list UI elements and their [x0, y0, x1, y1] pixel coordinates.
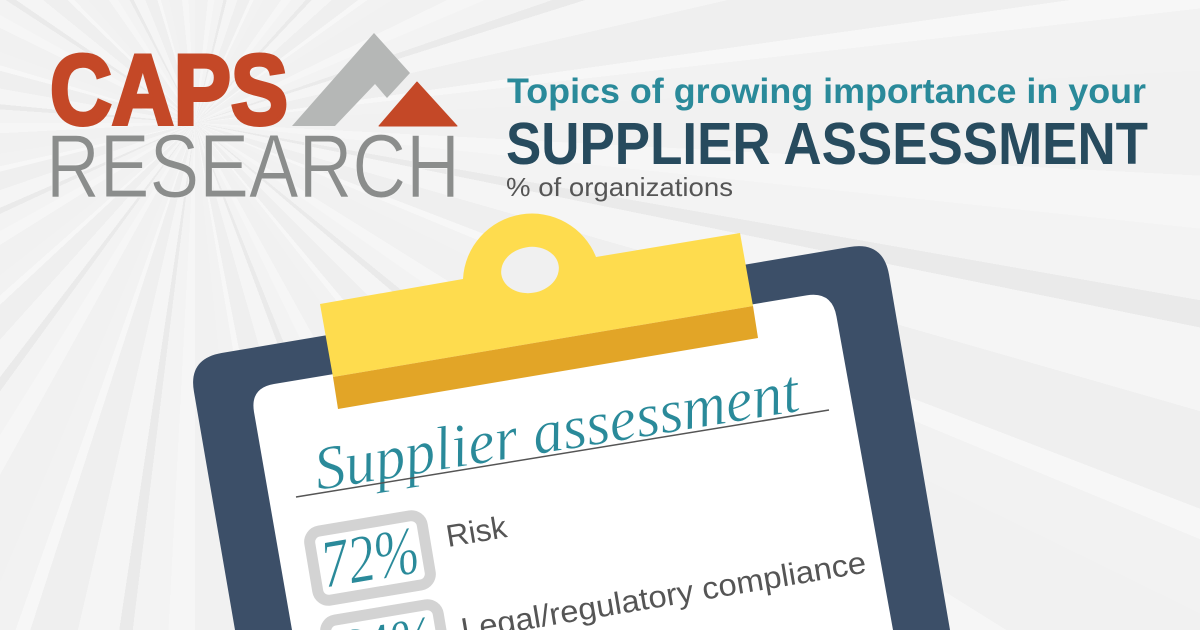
heading block [506, 72, 1148, 202]
checklist row: 64% Legal/regulatory compliance [323, 545, 869, 630]
clip: hole [498, 243, 562, 297]
logo mountain: red peak [379, 82, 457, 126]
clipboard paper [253, 295, 893, 630]
logo: CAPS Research [46, 33, 460, 217]
value box: 72%: 72% [315, 511, 424, 603]
logo word: RESEARCH: RESEARCH [46, 117, 460, 217]
logo mountain: grey peak [292, 33, 410, 126]
clipboard clip [320, 214, 758, 409]
clip: yellow body [320, 214, 753, 377]
checklist row: 72% Risk [307, 509, 510, 604]
clipboard board [193, 246, 950, 630]
clip: shaded lower band [333, 306, 758, 409]
title underline [296, 410, 829, 497]
heading line: topics of growing importance: Topics of growing importance in your [507, 72, 1146, 111]
subheading: % of organizations: % of organizations [506, 172, 733, 202]
logo word: CAPS: CAPS [50, 34, 288, 145]
checklist title: handwritten Supplier assessment: Supplier assessment [309, 357, 806, 504]
label: Risk: Risk [443, 509, 510, 554]
